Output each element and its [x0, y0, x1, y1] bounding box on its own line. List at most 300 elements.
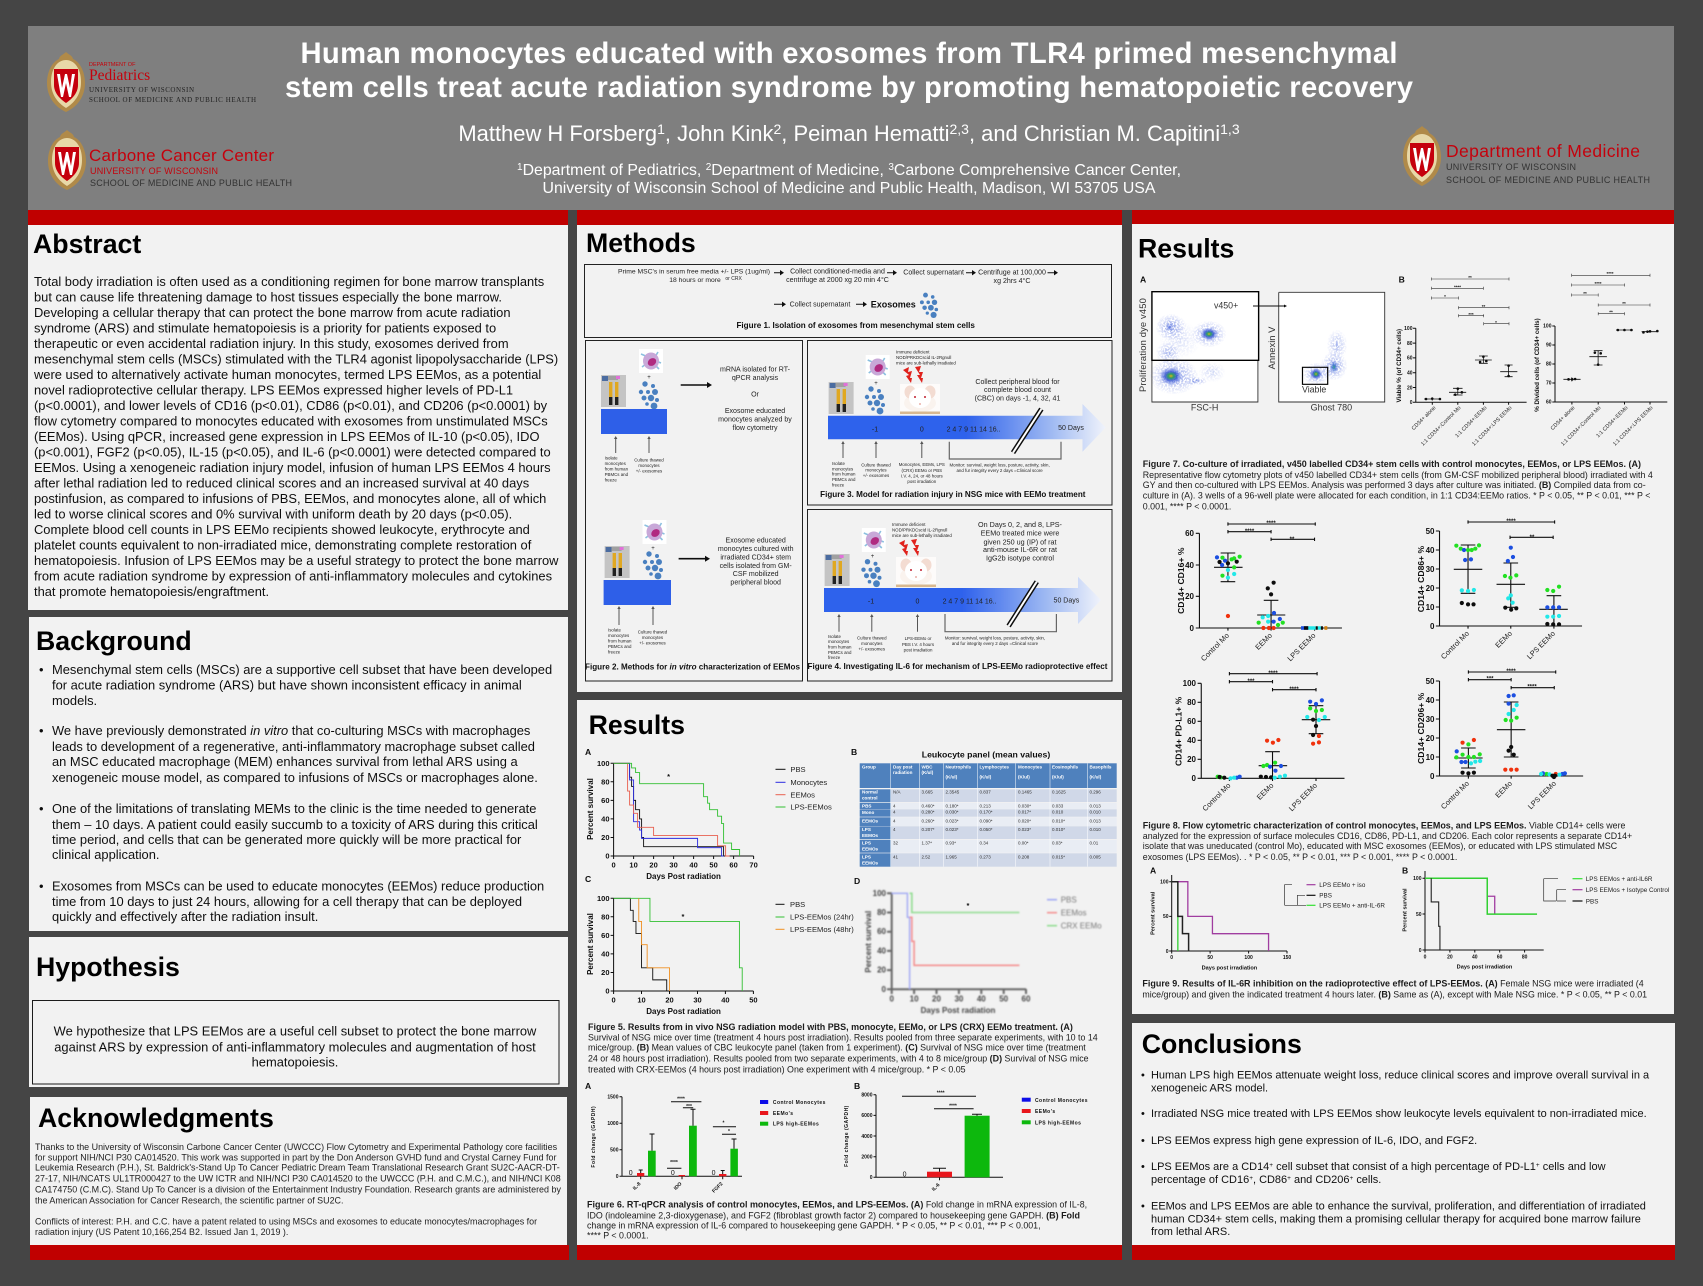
chart 6B: fold change IL-6: Control Monocytes: [1035, 1098, 1088, 1104]
figure 3: radiation injury model: [808, 340, 1112, 505]
chart 5A: survival: 30: [669, 861, 678, 870]
figure 2: in vitro methods: PBMCs and: [605, 472, 629, 477]
table 5B: leukocyte panel: 4: [893, 827, 896, 832]
figure 4: IL-6 mechanism: Monitor: survival, weight loss, posture, activity, skin,: [945, 636, 1045, 640]
figure 2: in vitro methods: monocytes analyzed by: [718, 416, 792, 424]
chart 8: CD14+ CD86+: 40: [1426, 546, 1435, 555]
affiliations: [517, 162, 1181, 197]
figure 2: in vitro methods: monocytes: [638, 463, 660, 468]
figure 2: in vitro methods: flow cytometry: [732, 425, 778, 432]
figure 3: radiation injury model: 0: [920, 426, 924, 434]
chart 5D: CRX EEMo survival: 60: [877, 927, 887, 936]
chart 6B: fold change IL-6: 8000: [861, 1092, 873, 1098]
affiliations: Department of Pediatrics,: [523, 162, 706, 179]
figure 1: exosome isolation: Collect supernatant: [790, 302, 850, 308]
table 5B: leukocyte panel: 0.030*: [1018, 804, 1031, 808]
chart 5D: CRX EEMo survival: 50: [999, 995, 1009, 1004]
chart 8: CD14+ CD206+: 10: [1426, 753, 1435, 762]
table 5B: leukocyte panel: Mono: [862, 810, 874, 815]
figure 7A: flow plots: Ghost 780: [1311, 403, 1352, 413]
chart 5C: survival delayed treatment: *: [682, 912, 685, 921]
chart 5C: survival delayed treatment: 0: [605, 987, 610, 996]
acknowledgments text: 27-17, NIH/NCATS UL1TR000427 to the UW ICTR and NIH/NCI P30 CA014520 to the UWCCC (P.H. and C.M.C.), and NIH/NCI K08: [35, 1174, 561, 1184]
abstract text: Developing a cellular therapy that can protect the bone marrow from acute radiation: [34, 305, 511, 320]
chart 5A: survival: 50: [709, 861, 718, 870]
figure 5 caption: treated with CRX-EEMos (4 hours post irradiation) One experiment with 4 mice/group. * P < 0.05: [588, 1065, 966, 1075]
chart 6A: fold change IL-8 IDO FGF2: EEMo's: [773, 1111, 793, 1117]
table 5B: leukocyte panel: Monocytes: [1018, 764, 1042, 770]
chart 6A: fold change IL-8 IDO FGF2: IDO: [673, 1181, 683, 1192]
chart 5C: survival delayed treatment: 50: [749, 996, 758, 1005]
figure 2: in vitro methods: qPCR analysis: [732, 375, 779, 382]
chart 8: CD14+ CD206+: 50: [1426, 677, 1435, 686]
figure 4: IL-6 mechanism: [808, 510, 1112, 681]
figure 3: radiation injury model: Isolate: [832, 461, 845, 466]
hypothesis box: hematopoiesis.: [252, 1055, 338, 1070]
affiliations: 3: [888, 162, 894, 173]
title: [285, 38, 1414, 104]
figure 7B: divided cells chart: CD34+ alone: [1550, 405, 1576, 432]
panel: results (survival and qPCR): [577, 700, 1122, 1245]
conclusions bullets: Irradiated NSG mice treated with LPS EEMos show leukocyte levels equivalent to non-irradiated mice.: [1151, 1108, 1647, 1120]
figure 7B: divided cells chart: 60: [1546, 400, 1552, 406]
heading: results: Results: [1138, 234, 1234, 264]
figure 3: radiation injury model: and fur integrity every 2 days =Clinical score: [956, 468, 1043, 473]
figure 5 caption: 24 or 48 hours post irradiation). Results pooled from two separate experiments, with 4 to 8 mice/group (D) Survival of NSG mice: [588, 1054, 1089, 1064]
heading: methods: Methods: [586, 228, 696, 258]
chart 8: CD14+ CD16+: 20: [1185, 592, 1195, 601]
figure 7B: viability chart: 1:1 CD34+:Control Mo: [1420, 405, 1462, 447]
table 5B: leukocyte panel: 0.020*: [1018, 818, 1031, 824]
chart 5A: survival: 20: [601, 833, 610, 842]
chart 6A: fold change IL-8 IDO FGF2: 0: [629, 1170, 633, 1177]
conclusions bullets: +: [1269, 1162, 1273, 1169]
conclusions bullets: , CD86: [1253, 1174, 1287, 1186]
figure 7 caption: Figure 7. Co-culture of irradiated, v450 labelled CD34+ stem cells with control monocytes, EEMos, or LPS EEMos. (A): [1143, 459, 1641, 469]
chart 8: CD14+ CD16+: **: [1290, 537, 1295, 543]
abstract text: Complete blood cell counts in LPS EEMo recipients showed leukocyte, erythrocyte and: [34, 522, 530, 537]
figure 6 caption: IDO (indoleamine 2,3-dioxygenase), and FGF2 (fibroblast growth factor 2) compared to housekeeping gene GAPDH. (B) Fold: [587, 1210, 1080, 1220]
chart 5A: survival: 0: [612, 861, 616, 870]
chart 8: CD14+ CD206+: [1416, 669, 1583, 811]
abstract text: flow cytometry compared to monocytes educated with exosomes from unstimulated MSCs: [34, 414, 548, 428]
figure 4: IL-6 mechanism: +/- exosomes: [859, 646, 886, 652]
background bullets: time period, and cells that can be generated more quickly will be more practical for: [52, 832, 522, 847]
figure 2: in vitro methods: [585, 340, 802, 681]
figure 3: radiation injury model: Monocytes, EEMs, LPS: [899, 462, 945, 467]
table 5B: leukocyte panel: WBC: [922, 764, 933, 770]
authors: 2,3: [950, 121, 969, 137]
figure 3: radiation injury model: freeze: [832, 482, 845, 487]
chart 5A: survival: LPS-EEMos: [790, 803, 832, 812]
background bullets: Mesenchymal stem cells (MSCs) are a supportive cell subset that have been developed: [52, 662, 552, 677]
chart 9A: female survival: LPS EEMo + iso: [1319, 882, 1366, 889]
table 5B: leukocyte panel: [851, 747, 1117, 867]
abstract text: were used to alternatively activate human monocytes, termed LPS EEMos, as a potential: [33, 367, 541, 382]
figure 4: IL-6 mechanism: monocytes: [828, 639, 850, 644]
figure 7A: flow plots: Proliferation dye v450: [1137, 298, 1148, 392]
conclusions bullets: +: [1349, 1175, 1353, 1182]
table 5B: leukocyte panel: 2.52: [922, 854, 931, 860]
chart 6A: fold change IL-8 IDO FGF2: IL-8: [632, 1181, 643, 1192]
chart 5C: survival delayed treatment: 20: [601, 968, 610, 977]
chart 5C: survival delayed treatment: LPS-EEMos (48hr): [790, 925, 854, 934]
conclusions bullets: percentage of CD16: [1151, 1174, 1381, 1186]
table 5B: leukocyte panel: 41: [893, 854, 899, 860]
figure 7B: viability chart: B: [1399, 275, 1405, 285]
chart 8: CD14+ CD86+: LPS EEMo: [1525, 629, 1557, 661]
chart 8: CD14+ CD16+: ****: [1266, 521, 1276, 527]
chart 6B: fold change IL-6: 4000: [861, 1134, 873, 1140]
authors: 2: [773, 121, 781, 137]
table 5B: leukocyte panel: 0.010: [1052, 810, 1064, 814]
chart 8: CD14+ CD86+: 0: [1430, 622, 1435, 631]
chart 5D: CRX EEMo survival: 80: [877, 908, 887, 917]
figure 2: in vitro methods: Figure 2. Methods for in vitro characterization of EEMos: [585, 662, 800, 672]
figure 3: radiation injury model: PBMCs and: [832, 477, 856, 482]
chart 6A: fold change IL-8 IDO FGF2: ****: [670, 1160, 678, 1166]
chart 8: CD14+ CD206+: 20: [1426, 734, 1435, 743]
chart 9A: female survival: 50: [1207, 955, 1213, 961]
logo: carbone cancer center: Carbone Cancer Center: [89, 146, 274, 165]
figure 6 caption: **** P < 0.0001.: [587, 1231, 649, 1241]
chart 6B: fold change IL-6: LPS high-EEMos: [1035, 1120, 1081, 1126]
chart 5A: survival: 10: [629, 861, 638, 870]
affiliations: University of Wisconsin School of Medicine and Public Health, Madison, WI 53705 USA: [543, 180, 1156, 197]
table 5B: leukocyte panel: 0.273: [980, 854, 991, 860]
title: stem cells treat acute radiation syndrome by promoting hematopoietic recovery: [285, 72, 1414, 104]
figure 4: IL-6 mechanism: PBMCs and: [828, 650, 852, 655]
chart 8: CD14+ CD206+: 40: [1426, 696, 1435, 705]
background bullets: them – 10 days. A patient could easily succumb to a toxicity of ARS during this critical: [52, 817, 538, 832]
figure 8 caption: Figure 8. Flow cytometric characterization of control monocytes, EEMos, and LPS EEMos. Viable CD14+ cells were: [1143, 820, 1625, 830]
logo: pediatrics: SCHOOL OF MEDICINE AND PUBLIC HEALTH: [89, 96, 256, 104]
heading: abstract: Abstract: [33, 229, 141, 259]
chart 5D: CRX EEMo survival: EEMos: [1061, 908, 1086, 918]
background bullets: One of the limitations of translating MEMs to the clinic is the time needed to generate: [52, 801, 536, 816]
figure 4: IL-6 mechanism: freeze: [828, 655, 841, 660]
chart 8: CD14+ CD206+: ****: [1506, 669, 1516, 675]
chart 5C: survival delayed treatment: 40: [601, 950, 610, 959]
chart 9A: female survival: 150: [1283, 955, 1291, 961]
abstract text: after lethal radiation led to reduced clinical scores and an increased survival at 40 days: [34, 476, 529, 490]
table 5B: leukocyte panel: 0.00*: [1018, 840, 1029, 846]
chart 6A: fold change IL-8 IDO FGF2: 0: [712, 1170, 716, 1177]
chart 9A: female survival: 0: [1166, 949, 1169, 955]
figure 2: in vitro methods: monocytes: [605, 461, 627, 466]
figure 7B: viability chart: 20: [1407, 385, 1413, 391]
background bullets: models.: [52, 693, 97, 708]
figure 3: radiation injury model: Culture thawed: [861, 462, 891, 468]
chart 5C: survival delayed treatment: Days Post radiation: [646, 1007, 721, 1016]
figure 2: in vitro methods: peripheral blood: [730, 580, 781, 586]
chart 6A: fold change IL-8 IDO FGF2: FGF2: [711, 1181, 725, 1194]
figure 7A: flow plots: [1137, 275, 1385, 413]
figure 2: in vitro methods: from human: [605, 466, 629, 472]
chart 5C: survival delayed treatment: 20: [665, 996, 674, 1005]
chart 8: CD14+ PD-L1+: Control Mo: [1200, 781, 1232, 813]
figure 7B: viability chart: *: [1444, 294, 1446, 299]
chart 6A: fold change IL-8 IDO FGF2: ***: [686, 1104, 692, 1110]
chart 5C: survival delayed treatment: 0: [612, 996, 616, 1005]
figure 1: exosome isolation: [584, 264, 1112, 338]
table 5B: leukocyte panel: radiation: [893, 770, 913, 775]
chart 5A: survival: 60: [601, 796, 610, 805]
chart 6B: fold change IL-6: 0: [903, 1172, 907, 1178]
figure 4: IL-6 mechanism: LPS-EEMo or: [905, 636, 932, 641]
figure 7 caption: 0.001, **** P < 0.0001.: [1143, 502, 1231, 512]
chart 5D: CRX EEMo survival: 40: [877, 946, 887, 956]
hypothesis box: [32, 1000, 559, 1084]
figure 2: in vitro methods: Culture thawed: [634, 458, 664, 462]
chart 8: CD14+ CD86+: Control Mo: [1439, 629, 1471, 661]
conclusions bullets: +: [1249, 1175, 1253, 1182]
figure 3: radiation injury model: from human: [832, 472, 856, 477]
chart 5D: CRX EEMo survival: 40: [977, 995, 986, 1004]
figure 7 caption: Representative flow cytometry plots of v450 labelled CD34+ stem cells (from GM-CSF mobilized peripheral blood) irradiated with 4: [1143, 470, 1653, 480]
figure 7B: divided cells chart: 70: [1546, 381, 1552, 387]
figure 2: in vitro methods: irradiated CD34+ stem: [720, 555, 791, 562]
figure 2: in vitro methods: Culture thawed: [638, 630, 668, 634]
figure 8 caption: isolate that was uneducated (control Mo), educated with MSC exosomes (EEMos), or educated with LPS stimulated MSC: [1143, 841, 1618, 851]
figure 7B: viability chart: 40: [1407, 370, 1413, 376]
abstract text: (p<0.001), FGF2 (p<0.05), IL-15 (p<0.05), and IL-6 (p<0.0001) were detected compared to: [34, 444, 551, 460]
figure 1: exosome isolation: Centrifuge at 100,000: [978, 270, 1046, 276]
figure 7A: flow plots: Viable: [1302, 385, 1326, 395]
chart 6A: fold change IL-8 IDO FGF2: *: [728, 1129, 730, 1135]
figure 7A: flow plots: A: [1140, 275, 1146, 285]
table 5B: leukocyte panel: 0.170*: [980, 810, 993, 814]
figure 3: radiation injury model: I.V. 4, 24, or 48 hours: [901, 473, 944, 478]
chart 5A: survival: *: [667, 772, 670, 781]
chart 5D: CRX EEMo survival: D: [854, 876, 860, 886]
chart 8: CD14+ PD-L1+: 20: [1187, 755, 1197, 764]
figure 4: IL-6 mechanism: Culture thawed: [857, 636, 887, 640]
figure 7B: viability chart: CD34+ alone: [1411, 405, 1437, 432]
figure 3: radiation injury model: (CBC) on days -1, 4, 32, 41: [975, 396, 1060, 402]
chart 5C: survival delayed treatment: 10: [637, 996, 646, 1005]
figure 7B: divided cells chart: 1:1 CD34+:Control Mo: [1560, 405, 1602, 447]
conclusions bullets: cells and low: [1540, 1161, 1606, 1173]
conclusions bullets: cell subset that consist of a high percentage of PD-L1: [1273, 1161, 1536, 1173]
figure 2: in vitro methods: Or: [751, 392, 760, 398]
chart 5D: CRX EEMo survival: PBS: [1061, 896, 1077, 904]
chart 8: CD14+ CD86+: EEMo: [1493, 629, 1514, 650]
hypothesis box: against ARS by expression of anti-inflammatory molecules and augmentation of host: [54, 1040, 536, 1055]
figure 3: radiation injury model: +: [874, 381, 878, 387]
chart 6A: fold change IL-8 IDO FGF2: 0: [671, 1170, 675, 1177]
acknowledgments text: CA174750 (C.M.C). Stand Up To Cancer is a division of the Entertainment Industry Foundation. Research grants are administered by: [35, 1185, 561, 1195]
chart 5A: survival: Days Post radiation: [646, 872, 721, 881]
authors: , and Christian M. Capitini: [969, 121, 1220, 146]
chart 5A: survival: Monocytes: [790, 778, 827, 787]
figure 7B: viability chart: 1:1 CD34+:LPS EEMo: [1471, 405, 1513, 447]
figure 4: IL-6 mechanism: monocytes: [861, 641, 883, 646]
figure 2: in vitro methods: +: [647, 375, 651, 381]
figure 7A: flow plots: Annexin V: [1266, 326, 1277, 369]
acknowledgments text: Conflicts of interest: P.H. and C.C. have a patent related to using MSCs and exosomes to educate monocytes/macrophages for: [35, 1216, 537, 1226]
chart 5A: survival: EEMos: [790, 790, 815, 799]
figure 7B: divided cells chart: 1:1 CD34+:EEMo: [1595, 405, 1629, 439]
conclusions bullets: EEMos and LPS EEMos are able to enhance the survival, proliferation, and differentiation of irradiated: [1151, 1200, 1646, 1212]
figure 1: exosome isolation: Prime MSC's in serum free media +/- LPS (1ug/ml): [618, 268, 770, 276]
logo: carbone cancer center: UNIVERSITY OF WISCONSIN: [90, 166, 218, 176]
figure 7A: flow plots: FSC-H: [1191, 403, 1218, 413]
figure 3: radiation injury model: 50 Days: [1058, 425, 1084, 432]
chart 8: CD14+ CD206+: 30: [1426, 715, 1435, 724]
figure 7B: viability chart: *: [1495, 320, 1497, 325]
figure 7B: divided cells chart: **: [1583, 291, 1587, 296]
chart 5C: survival delayed treatment: PBS: [790, 900, 805, 909]
table 5B: leukocyte panel: 0.005: [1090, 854, 1101, 860]
figure 7B: viability chart: 0: [1410, 400, 1413, 406]
figure 3: radiation injury model: complete blood count: [984, 387, 1051, 394]
chart 5D: CRX EEMo survival: 0: [889, 995, 894, 1004]
table 5B: leukocyte panel: 0.010: [1090, 827, 1101, 832]
chart 5D: CRX EEMo survival: 100: [873, 889, 887, 898]
abstract text: EEMos. Using a xenogeneic radiation injury model, infusion of human LPS EEMos 4 hours: [34, 460, 551, 475]
table 5B: leukocyte panel: (K/ul): [946, 774, 958, 780]
chart 9A: female survival: 0: [1170, 955, 1173, 961]
figure 4: IL-6 mechanism: -1: [868, 598, 874, 606]
conclusions bullets: Human LPS high EEMos attenuate weight loss, reduce clinical scores and improve overall survival in a: [1151, 1070, 1650, 1082]
figure 4: IL-6 mechanism: from human: [828, 644, 852, 650]
figure 7B: viability chart: 80: [1407, 341, 1413, 347]
figure 3: radiation injury model: -1: [872, 426, 878, 434]
conclusions bullets: •: [1141, 1135, 1145, 1147]
background bullets: leads to development of a regenerative, anti-inflammatory macrophage subset called: [52, 739, 535, 754]
figure 7B: viability chart: 100: [1404, 326, 1413, 332]
chart 8: CD14+ PD-L1+: ***: [1247, 679, 1255, 685]
table 5B: leukocyte panel: N/A: [893, 790, 901, 794]
figure 4: IL-6 mechanism: anti-mouse IL-6R or rat: [983, 545, 1057, 554]
figure 3: radiation injury model: monocytes: [832, 466, 854, 471]
figure 7B: viability chart: Viable % (of CD34+ cells): [1396, 329, 1403, 403]
table 5B: leukocyte panel: 0.208: [1018, 854, 1030, 860]
table 5B: leukocyte panel: (K/ul): [1018, 774, 1030, 780]
heading: hypothesis: Hypothesis: [36, 952, 180, 982]
chart 5A: survival: 100: [597, 759, 610, 768]
abstract text: (EEMos). Using qPCR, increased gene expression in LPS EEMos of IL-10 (p<0.05), IDO: [34, 429, 539, 444]
table 5B: leukocyte panel: (K/ul): [980, 774, 992, 780]
figure 3: radiation injury model: Immune deficient: [896, 350, 930, 354]
table 5B: leukocyte panel: 0.017*: [1018, 810, 1031, 814]
header banner: [28, 26, 1674, 210]
figure 1: exosome isolation: Exosomes: [871, 300, 916, 310]
chart 5A: survival: Percent survival: [586, 778, 595, 840]
affiliations: 2: [706, 162, 712, 173]
table 5B: leukocyte panel: 0.1625: [1052, 790, 1066, 794]
chart 5C: survival delayed treatment: 100: [597, 894, 610, 903]
table 5B: leukocyte panel: LPS: [862, 827, 871, 832]
figure 7B: divided cells chart: ****: [1606, 271, 1614, 276]
chart 5D: CRX EEMo survival: CRX EEMo: [1061, 922, 1102, 930]
chart 8: CD14+ CD16+: [1176, 521, 1342, 663]
background bullets: xenogeneic mouse model, as compared to infusions of MSCs or macrophages alone.: [52, 770, 538, 785]
chart 8: CD14+ PD-L1+: CD14+ PD-L1+ %: [1174, 696, 1184, 766]
chart 5C: survival delayed treatment: 60: [601, 931, 610, 940]
chart 8: CD14+ CD86+: [1416, 519, 1582, 661]
figure 4: IL-6 mechanism: given 250 ug (IP) of rat: [983, 537, 1057, 546]
chart 6B: fold change IL-6: 0: [870, 1175, 873, 1181]
chart 5D: CRX EEMo survival: Percent survival: [864, 911, 873, 973]
figure 3: radiation injury model: NOD/PRKDCscid IL-2Rgnull: [896, 355, 951, 360]
figure 7B: divided cells chart: 100: [1543, 324, 1552, 330]
chart 9A: female survival: Days post irradiation: [1202, 965, 1258, 971]
figure 3: radiation injury model: mice are sub-lethally irradiated: [896, 360, 956, 366]
conclusions bullets: human CD34+ stem cells, making them a promising cellular therapy for acquired bone marrow failure: [1151, 1213, 1641, 1225]
chart 8: CD14+ PD-L1+: LPS EEMo: [1287, 781, 1319, 813]
conclusions bullets: •: [1141, 1108, 1145, 1120]
table 5B: leukocyte panel: 0.180*: [946, 804, 959, 808]
chart 6A: fold change IL-8 IDO FGF2: Fold change (GAPDH): [591, 1106, 597, 1168]
table 5B: leukocyte panel: 3.665: [922, 790, 933, 794]
chart 8: CD14+ PD-L1+: 0: [1192, 774, 1197, 783]
figure 2: in vitro methods: Isolate: [605, 456, 618, 460]
table 5B: leukocyte panel: 0.033: [1052, 804, 1064, 808]
logo: carbone cancer center: [48, 130, 292, 190]
chart 8: CD14+ CD206+: 0: [1430, 772, 1435, 781]
figure 7B: divided cells chart: 80: [1546, 362, 1552, 368]
heading: results: Results: [589, 710, 685, 740]
panel: conclusions: [1132, 1023, 1675, 1245]
abstract text: mesenchymal stem cells (MSCs) stimulated with the TLR4 agonist lipopolysaccharide (LPS): [34, 352, 558, 366]
figure 1: exosome isolation: Figure 1. Isolation of exosomes from mesenchymal stem cells: [736, 321, 975, 330]
chart 5D: CRX EEMo survival: 20: [932, 995, 941, 1004]
figure 1: exosome isolation: or CRX: [725, 276, 742, 282]
table 5B: leukocyte panel: 1.37*: [922, 840, 932, 846]
figure 4: IL-6 mechanism: Figure 4. Investigating IL-6 for mechanism of LPS-EEMo radioprotective effect: [808, 662, 1108, 671]
abstract text: syndrome (ARS) and stimulate hematopoiesis is a priority for patients exposed to: [34, 320, 496, 336]
figure 7A: flow plots: v450+: [1214, 301, 1238, 311]
hypothesis box: We hypothesize that LPS EEMos are a useful cell subset to protect the bone marrow: [54, 1024, 537, 1039]
figure 7B: divided cells chart: [1534, 271, 1667, 447]
chart 5D: CRX EEMo survival: 20: [877, 966, 887, 974]
chart 8: CD14+ PD-L1+: ****: [1268, 671, 1278, 677]
figure 2: in vitro methods: +/- exosomes: [639, 640, 667, 646]
figure 7B: viability chart: 1:1 CD34+:EEMo: [1454, 405, 1488, 439]
table 5B: leukocyte panel: 0.260*: [922, 818, 935, 824]
chart 9B: male survival: 0: [1419, 948, 1422, 954]
acknowledgments text: Leukemia Research (P.H.), St. Baldrick's-Stand Up To Cancer Pediatric Dream Team Translational Research Grant SU2C-AACR-DT-: [35, 1163, 560, 1173]
chart 9B: male survival: LPS EEMos + anti-IL6R: [1586, 876, 1653, 883]
table 5B: leukocyte panel: control: [862, 796, 878, 800]
chart 6A: fold change IL-8 IDO FGF2: 1500: [607, 1094, 619, 1100]
chart 8: CD14+ PD-L1+: 60: [1187, 717, 1197, 726]
figure 7B: divided cells chart: **: [1609, 310, 1613, 314]
table 5B: leukocyte panel: 0.93*: [946, 840, 956, 846]
chart 6B: fold change IL-6: EEMo's: [1035, 1109, 1056, 1115]
chart 9A: female survival: A: [1150, 865, 1156, 875]
figure 4: IL-6 mechanism: PBS I.V. 4 hours: [902, 642, 935, 647]
abstract text: led to worse clinical scores and 0% survival with uniform death by 20 days (p<0.05).: [34, 506, 512, 522]
table 5B: leukocyte panel: 0.1465: [1018, 790, 1032, 794]
panel: abstract: [28, 225, 568, 610]
figure 6 caption: Figure 6. RT-qPCR analysis of control monocytes, EEMos, and LPS-EEMos. (A) Fold change in mRNA expression of IL-8,: [587, 1199, 1087, 1209]
authors: 1: [657, 121, 665, 137]
table 5B: leukocyte panel: 4: [893, 804, 896, 808]
figure 9 caption: Figure 9. Results of IL-6R inhibition on the radioprotective effect of LPS-EEMos. (A) Female NSG mice were irradiated (4: [1142, 979, 1644, 989]
table 5B: leukocyte panel: 0.030*: [946, 810, 959, 814]
table 5B: leukocyte panel: 0.010*: [1052, 818, 1065, 824]
abstract text: postinfusion, as compared to infusions of PBS, EEMos, and monocytes alone, all of which: [34, 491, 546, 506]
chart 5C: survival delayed treatment: 30: [693, 996, 702, 1005]
figure 2: in vitro methods: Exosome educated: [726, 538, 786, 545]
figure 7B: viability chart: 60: [1407, 356, 1413, 362]
conclusions bullets: and CD206: [1291, 1174, 1349, 1186]
chart 9B: male survival: LPS EEMos + Isotype Control: [1586, 887, 1669, 894]
chart 9B: male survival: 100: [1413, 876, 1422, 882]
